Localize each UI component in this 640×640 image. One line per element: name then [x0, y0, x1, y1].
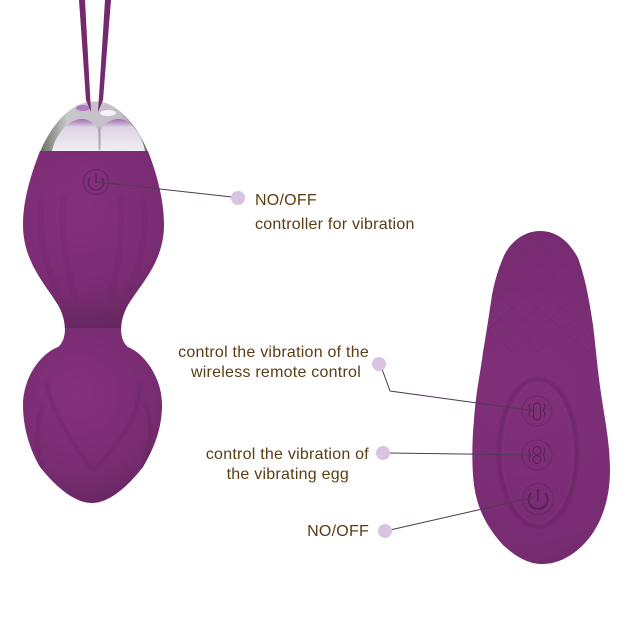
- petal crease: [38, 382, 150, 471]
- callout: remote power switch: [307, 497, 535, 540]
- callout text: wireless remote control: wireless remote control: [190, 364, 361, 381]
- button: egg vibration: [522, 440, 552, 470]
- callout: egg power switch: [96, 182, 317, 209]
- upper silicone body: [23, 151, 164, 332]
- marker dot: [376, 446, 390, 460]
- icon: silver egg cap: [40, 102, 148, 152]
- body ribbing: [41, 195, 145, 300]
- remote textured top: [483, 231, 596, 352]
- leader line: [382, 369, 535, 411]
- label text: control the vibration of: [206, 446, 369, 463]
- callout text: the vibrating egg: the vibrating egg: [227, 466, 349, 483]
- lower silicone ball: [23, 328, 162, 503]
- leader line: [390, 497, 535, 530]
- remote body: [472, 231, 610, 564]
- button panel outline: [499, 379, 577, 527]
- label text: NO/OFF: [307, 523, 369, 540]
- callout: egg vibration control: [206, 446, 533, 463]
- egg cord: [79, 0, 111, 112]
- callout: remote vibration control: [178, 344, 535, 411]
- callout text: controller for vibration: controller for vibration: [255, 216, 415, 233]
- button: remote vibration: [522, 396, 552, 426]
- label text: control the vibration of the: [178, 344, 369, 361]
- marker dot: [372, 357, 386, 371]
- panel: vibrating egg product: [23, 0, 164, 503]
- button: power: [522, 484, 554, 514]
- label text: NO/OFF: [255, 192, 317, 209]
- leader line: [388, 453, 533, 455]
- panel: wireless remote control: [472, 231, 610, 564]
- marker dot: [231, 191, 245, 205]
- leader line: [96, 182, 232, 197]
- power button on egg: [84, 170, 108, 194]
- marker dot: [378, 524, 392, 538]
